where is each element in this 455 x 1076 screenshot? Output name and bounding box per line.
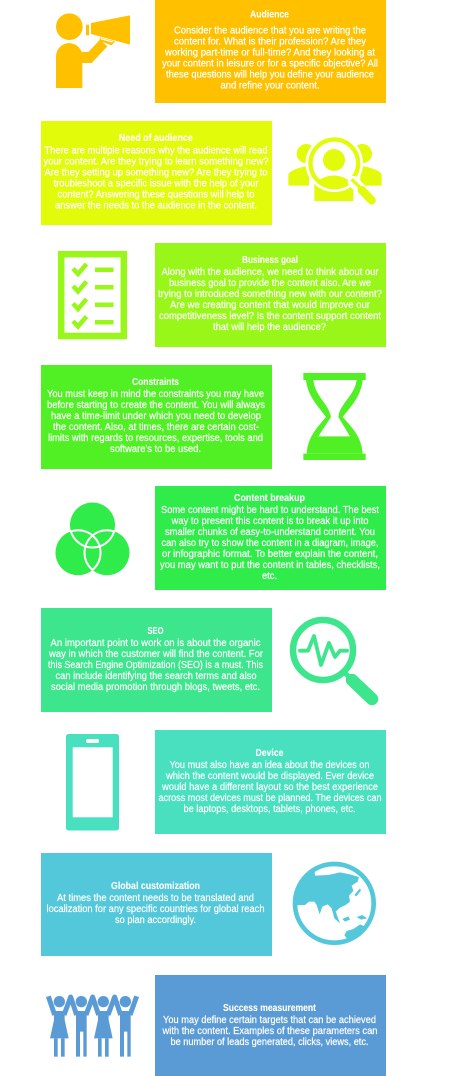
text block: device: be laptops, desktops, tablets, phones, etc. xyxy=(184,804,356,815)
text block: seo: can include identifying the search terms and also xyxy=(56,671,257,682)
text block: business goal: Are we creating content that would improve our xyxy=(170,300,371,311)
panel: global customization xyxy=(41,853,272,956)
text block: need of audience: There are multiple reasons why the audience will read xyxy=(44,146,268,156)
heading: constraints: Constraints xyxy=(132,377,179,388)
text block: content breakup: way to present this content is to break it up into xyxy=(171,516,369,527)
panel: success measurement xyxy=(155,975,386,1076)
text block: constraints: limits with regards to resources, expertise, tools and xyxy=(48,433,263,444)
text block: global customization xyxy=(46,893,264,926)
text block: content breakup: can also try to show the content in a diagram, image, xyxy=(162,538,378,549)
text block: device: across most devices must be planned. The devices can xyxy=(158,793,382,804)
text block: global customization: so plan accordingly. xyxy=(115,915,196,926)
text block: constraints: software's to be used. xyxy=(110,444,201,455)
heading: device: Device xyxy=(256,748,284,759)
text block: business goal: that will help the audience? xyxy=(213,322,326,333)
text block: constraints: before starting to create the content. You will always xyxy=(47,400,265,411)
heading: business goal: Business goal xyxy=(242,255,298,266)
text block: content breakup xyxy=(160,505,380,582)
panel: content breakup xyxy=(155,486,386,590)
icon: venn diagram xyxy=(56,502,130,575)
text block: seo: this Search Engine Optimization (SEO) is a must. This xyxy=(48,660,263,671)
text block: constraints: the content. Also, at times, there are certain cost- xyxy=(53,422,259,433)
heading: seo: SEO xyxy=(148,626,164,637)
text block: business goal: Along with the audience, we need to think about our xyxy=(162,267,379,278)
panel: business goal xyxy=(155,243,386,347)
heading: success measurement: Success measurement xyxy=(223,1003,317,1014)
text block: content breakup: you may want to put the content in tables, checklists, xyxy=(160,560,380,571)
heading: global customization: Global customization xyxy=(111,881,200,892)
text block: business goal: competitiveness level? Is the content support content xyxy=(159,311,381,322)
text block: need of audience xyxy=(44,146,269,212)
text block: content breakup: etc. xyxy=(262,571,277,582)
text block: constraints: You must keep in mind the constraints you may have xyxy=(47,389,264,400)
text block: device: which the content would be displayed. Ever device xyxy=(165,771,374,782)
text block: need of audience: content? Answering these questions will help to xyxy=(58,190,255,200)
text block: need of audience: answer the needs to the audience in the content. xyxy=(55,200,257,212)
text block: device: You must also have an idea about the devices on xyxy=(170,760,370,771)
text block: seo: An important point to work on is about the organic xyxy=(50,638,260,649)
text block: content breakup: Some content might be hard to understand. The best xyxy=(161,505,379,516)
text block: audience xyxy=(162,26,378,92)
icon: globe xyxy=(292,862,376,945)
text block: seo: social media promotion through blogs, tweets, etc. xyxy=(51,682,260,693)
text block: constraints xyxy=(47,389,265,455)
text block: success measurement xyxy=(162,1015,378,1048)
text block: audience: and refine your content. xyxy=(220,80,320,92)
icon: people under magnifying glass xyxy=(288,135,382,201)
text block: global customization: localization for any specific countries for global reach xyxy=(46,904,264,915)
text block: audience: these questions will help you define your audience xyxy=(166,70,374,80)
text block: business goal: trying to introduced something new with our content? xyxy=(158,289,382,300)
text block: success measurement: with the content. Examples of these parameters can xyxy=(162,1026,378,1037)
icon: magnifier with pulse line xyxy=(293,620,372,699)
panel: seo xyxy=(41,608,272,712)
text block: business goal: business goal to provide the content also. Are we xyxy=(169,278,371,289)
text block: seo: way in which the customer will find the content. For xyxy=(48,649,264,660)
icon: checklist xyxy=(61,254,124,336)
panel: need of audience xyxy=(41,121,272,225)
text block: audience: your content in leisure or for a specific objective? All xyxy=(162,58,378,70)
icon: hourglass xyxy=(303,373,366,460)
text block: need of audience: troubleshoot a specific issue with the help of your xyxy=(54,178,259,190)
text block: content breakup: smaller chunks of easy-to-understand content. You xyxy=(165,527,375,538)
text block: audience: Consider the audience that you are writing the xyxy=(174,26,366,36)
panel: constraints xyxy=(41,365,272,469)
heading: audience: Audience xyxy=(250,10,289,20)
icon: mobile phone xyxy=(66,734,119,830)
text block: global customization: At times the content needs to be translated and xyxy=(57,893,254,904)
text block: success measurement: You may define certain targets that can be achieved xyxy=(163,1015,376,1026)
panel: device xyxy=(155,730,386,834)
text block: need of audience: Are they setting up something new? Are they trying to xyxy=(44,168,268,178)
text block: content breakup: or infographic format. To better explain the content, xyxy=(162,549,378,560)
heading: content breakup: Content breakup xyxy=(234,493,305,504)
icon: person with megaphone xyxy=(56,13,130,88)
text block: audience: content for. What is their profession? Are they xyxy=(174,36,366,48)
heading: need of audience: Need of audience xyxy=(119,133,193,144)
text block: device xyxy=(158,760,382,815)
text block: seo xyxy=(48,638,264,693)
icon: four people with raised hands xyxy=(48,996,137,1057)
text block: device: would have a different layout so the best experience xyxy=(161,782,378,793)
text block: business goal xyxy=(158,267,382,333)
text block: constraints: have a time-limit under which you need to develop xyxy=(51,411,261,422)
panel: audience xyxy=(155,0,386,103)
text block: audience: working part-time or full-time? And they looking at xyxy=(164,48,375,58)
text block: need of audience: your content. Are they trying to learn something new? xyxy=(44,156,269,168)
text block: success measurement: be number of leads generated, clicks, views, etc. xyxy=(170,1037,368,1048)
